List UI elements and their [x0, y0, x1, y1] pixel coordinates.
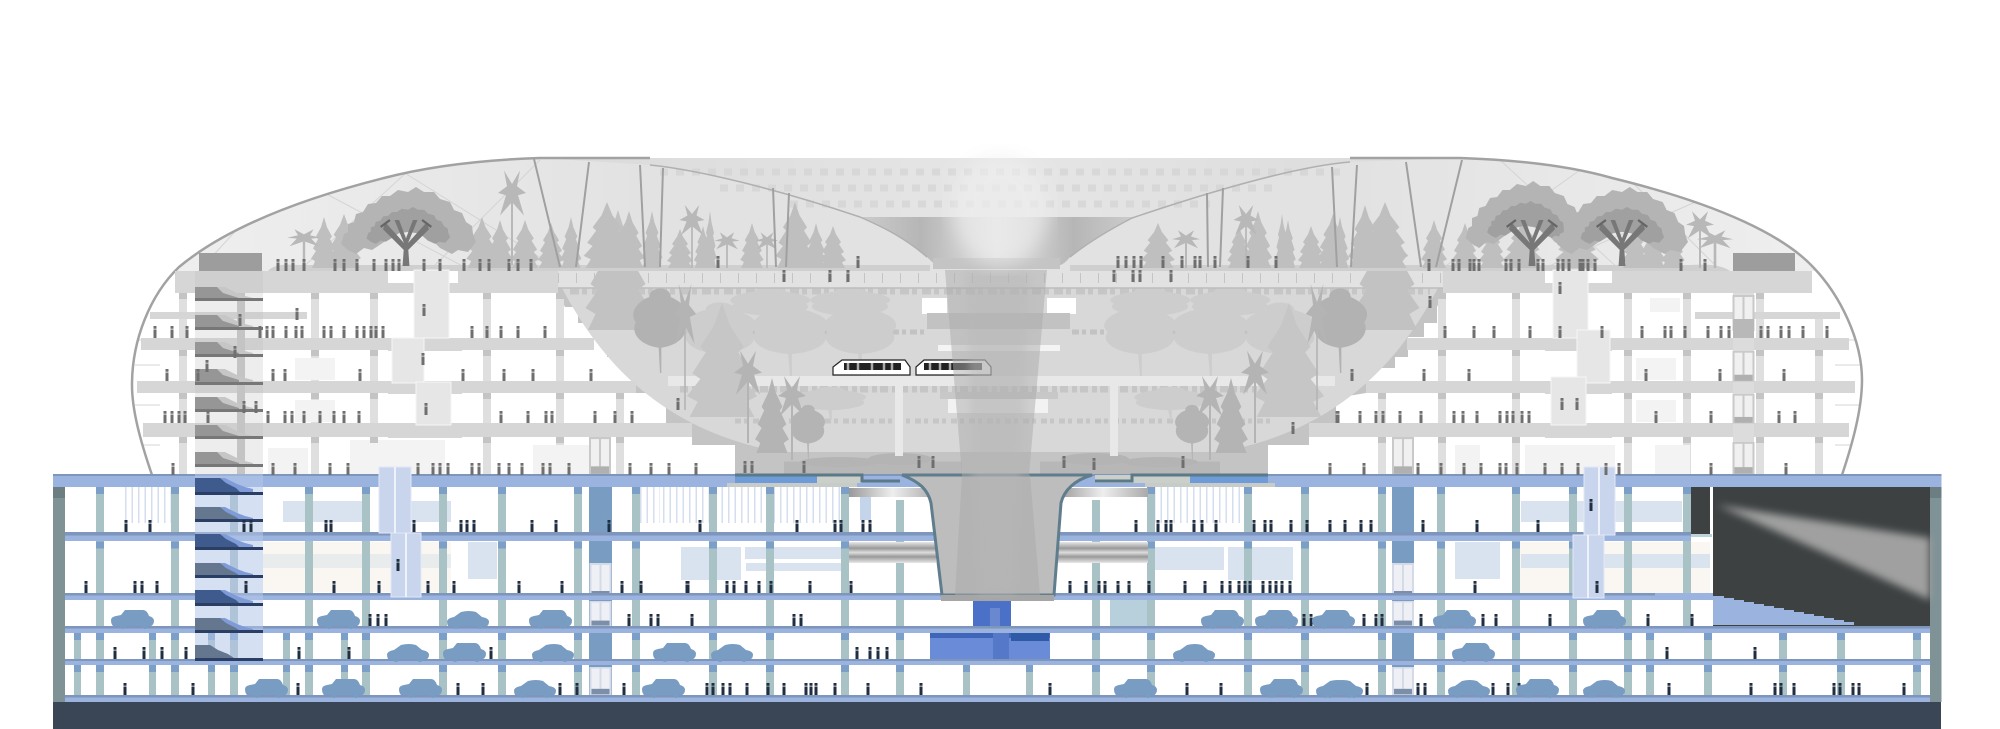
striped band right — [1058, 542, 1148, 563]
windows — [848, 363, 950, 370]
palms left — [674, 284, 806, 460]
bridge deck — [558, 270, 1443, 288]
central plant room — [930, 601, 1050, 659]
funnel chevron texture — [660, 172, 1340, 204]
roof garden — [268, 159, 1733, 271]
side glazing band left — [849, 488, 936, 497]
theatre balcony beam — [1632, 534, 1712, 537]
background shop fronts — [268, 358, 603, 475]
escalators — [1551, 270, 1610, 425]
dome outline — [132, 158, 1862, 475]
floor slabs — [53, 474, 1942, 702]
escalators — [379, 467, 1615, 598]
projector beam — [1717, 505, 1930, 600]
raked seating — [1713, 596, 1854, 625]
left transfer — [727, 475, 900, 487]
car one — [833, 360, 910, 375]
vertical mullion screens — [125, 487, 1244, 523]
slabs — [1309, 271, 1855, 438]
elevator — [589, 437, 611, 475]
upper floors right — [1309, 253, 1855, 475]
second elevator — [1392, 437, 1414, 475]
large conifer right — [1354, 210, 1420, 330]
cone base — [941, 595, 1054, 601]
upper floors left — [137, 253, 692, 475]
column caps — [74, 490, 1921, 668]
pale interior panels — [263, 497, 1710, 626]
right transfer — [1095, 475, 1275, 487]
foreground trees left — [755, 378, 825, 460]
retaining wall right — [1930, 487, 1942, 702]
parked cars — [111, 610, 1626, 698]
conifer left lower — [687, 303, 757, 417]
people basement floors — [86, 499, 1904, 695]
striped band left — [849, 542, 936, 563]
foundation base — [53, 702, 1941, 729]
conifers — [311, 202, 1685, 268]
background shop fronts — [1455, 298, 1690, 475]
broadleaf tree right — [1313, 288, 1367, 373]
water tank lower — [930, 633, 1050, 659]
funnel neck ring — [933, 258, 1060, 269]
courtyard bowl — [558, 270, 1443, 475]
columns — [1378, 293, 1823, 475]
column caps — [1378, 296, 1823, 440]
theatre dark box — [1691, 487, 1710, 534]
stair shaft — [195, 271, 263, 475]
escalators — [392, 270, 451, 425]
roof plant box — [1733, 253, 1795, 271]
large conifer left — [586, 210, 650, 330]
palms — [287, 170, 1733, 268]
slabs — [137, 271, 692, 438]
central cone — [902, 475, 1092, 601]
bowl trees — [586, 210, 1420, 460]
conifer right lower — [1254, 303, 1324, 417]
upper building: glass dome — [135, 159, 1860, 446]
columns — [74, 487, 1921, 695]
umbrella tree right two — [1557, 187, 1688, 266]
dome sky interior — [130, 155, 1870, 445]
lower plaza terrace — [735, 452, 1268, 475]
funnel upper surface — [540, 158, 1460, 218]
under-bowl transfer slab — [727, 475, 1275, 563]
funnel roof — [540, 158, 1460, 269]
ground shrubs — [268, 265, 1730, 271]
column caps — [179, 296, 624, 440]
side glazing band right — [1058, 488, 1148, 497]
funnel mist — [952, 155, 1048, 265]
umbrella tree left — [341, 187, 476, 266]
basement structure — [53, 467, 1942, 729]
funnel lower surface — [860, 217, 1134, 265]
bowl stepped outer terrace — [558, 271, 1443, 475]
bowl planted wall — [562, 288, 1438, 452]
columns — [179, 293, 624, 475]
roof plant box — [199, 253, 262, 271]
dome struts — [534, 159, 1462, 267]
broadleaf tree left — [633, 288, 687, 373]
people upper floors — [155, 256, 1827, 475]
elevator core left — [589, 487, 612, 695]
monorail train — [833, 360, 991, 375]
hanging foliage bands — [570, 291, 1430, 421]
waterfall — [945, 155, 1048, 595]
dome glazing shell — [132, 158, 1862, 475]
water tank upper — [973, 601, 1011, 626]
umbrella tree right one — [1466, 181, 1587, 266]
elevator core right — [1392, 487, 1414, 695]
car two — [916, 360, 991, 375]
auditorium — [1713, 487, 1930, 626]
palms right — [1196, 284, 1328, 460]
elevator core — [1732, 293, 1754, 475]
foreground trees right — [1175, 378, 1248, 460]
retaining wall left — [53, 487, 65, 702]
central white openings and platforms — [922, 298, 947, 314]
background planting silhouettes — [684, 288, 1316, 420]
monorail viaduct — [668, 376, 1335, 386]
stair shaft — [195, 474, 263, 661]
funnel edge — [650, 162, 1350, 257]
theatre — [1632, 487, 1930, 626]
